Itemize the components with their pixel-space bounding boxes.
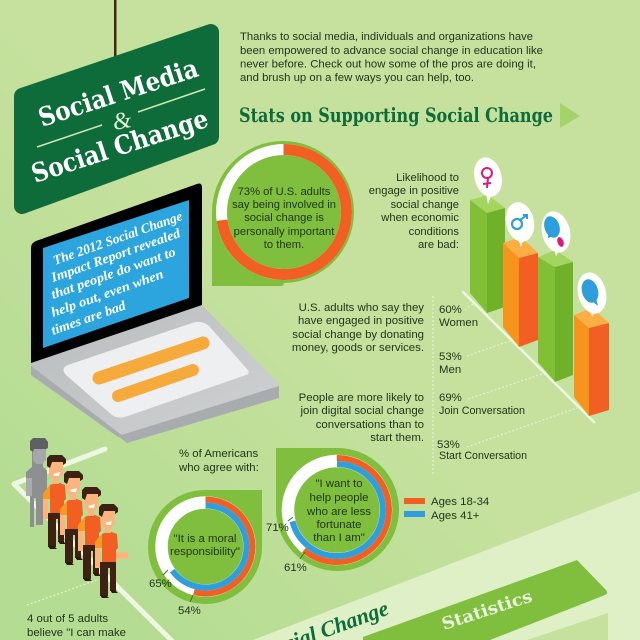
intro paragraph: Thanks to social media, individuals and organizations have [240,31,533,43]
text: donating [292,302,424,354]
intro paragraph: been empowered to advance social change in education like [240,45,543,57]
laptop screen text: that people do want to [49,244,178,302]
text: likelihood: conditions [409,226,459,238]
text: percent of Americans: % of Americans [179,448,258,460]
laptop screen text: help out, even when [49,266,165,320]
bar labels: Start Conversation [439,450,527,462]
text: digital conversations: People are more likely to [299,392,424,404]
heading arrow [560,103,580,128]
statistics label: Statistics [439,587,535,635]
dotted guide lines [27,296,577,605]
donut: moral responsibility [148,490,262,617]
title sign [22,32,212,206]
legend [404,496,489,522]
lower light band [253,491,640,640]
donut: moral responsibility: "It is a moral [174,533,236,545]
title text: Social Media: Social Media [35,54,202,134]
bar: join conversation [537,208,575,382]
person: fourth orange [95,504,128,598]
bar labels: Join Conversation [439,405,525,417]
text: donating: social change by donating [292,329,424,341]
text: likelihood: are bad: [418,239,459,251]
text: donating: have engaged in positive [298,315,424,327]
laptop screen text: times are bad [49,298,128,338]
icon: male bubble [502,200,538,247]
title ampersand: & [111,107,134,136]
intro paragraph: never before. Check out how some of the pros are doing it, [240,58,536,70]
donut: moral responsibility: responsibility" [170,546,240,558]
donut: 73 percent: 73% of U.S. adults [238,186,331,198]
donut: 73 percent: personally important [234,226,335,238]
text: digital conversations: join digital social change [300,405,424,417]
bar labels: 60% [439,304,462,316]
intro paragraph [240,31,543,84]
donut: 73 percent: to them. [264,239,304,251]
bar: women [470,154,506,313]
laptop screen text: Impact Report revealed [48,225,182,285]
text: likelihood: social change [391,199,459,211]
statistics ribbon [363,560,607,640]
legend: Ages 41+ [431,510,480,522]
laptop screen text [48,208,184,338]
person: third orange [78,487,101,581]
text: likelihood: when economic [380,212,459,224]
donut: 73 percent: social change is [244,212,324,224]
laptop screen [31,184,202,363]
lower panel [527,613,608,640]
text: donating: money, goods or services. [292,342,424,354]
donut: moral responsibility: 65% [149,578,172,590]
text: digital conversations: start them. [370,432,424,444]
text: 4 out of 5 adults: believe "I can make [27,627,126,639]
text: digital conversations [299,392,424,444]
laptop screen text: The 2012 Social Change [51,208,184,268]
person: first orange [43,455,66,549]
rope [114,0,116,58]
laptop [31,184,279,443]
donut: fortunate [266,448,399,574]
floor lines [14,292,594,640]
people illustration [26,438,128,598]
donut: fortunate: 71% [266,522,289,534]
text: 4 out of 5 adults: 4 out of 5 adults [27,613,108,625]
bar labels: Men [439,364,461,376]
text: likelihood: Likelihood to [396,172,459,184]
bar labels: 53% [437,439,460,451]
donut: fortunate: fortunate [317,519,361,531]
donut: fortunate: "I want to [315,478,363,490]
intro paragraph: and brush up on a few ways you can help, too. [240,72,474,84]
icon: two speech bubbles [537,208,575,256]
bar: men [502,200,538,347]
person: second orange [60,471,83,565]
text: likelihood [369,172,459,251]
bar labels: 53% [439,351,462,363]
donut: 73 percent [212,141,354,286]
text: percent of Americans [178,448,259,474]
legend: Ages 18-34 [431,496,489,508]
person: gray adult [26,438,48,527]
text: likelihood: engage in positive [369,185,459,197]
text: donating: U.S. adults who say they [299,302,424,314]
donut: fortunate: help people [310,492,368,504]
title text: Social Change: Social Change [28,104,212,190]
section heading: Stats on Supporting Social Change [239,103,553,127]
icon: female bubble [470,154,506,204]
icon: speech bubble [573,269,611,317]
donut: 73 percent: say being involved in [232,199,336,211]
bar labels [437,304,527,462]
bar labels: Women [439,317,478,329]
bar: start conversation [573,269,611,416]
bar labels: 69% [439,392,462,404]
text: digital conversations: conversations than to [316,419,424,431]
laptop base [31,305,279,443]
donut: fortunate: 61% [284,562,307,574]
text: percent of Americans: who agree with: [178,462,259,474]
donut: fortunate: who are less [306,506,371,518]
donut: moral responsibility: 54% [178,605,201,617]
donut: fortunate: than I am" [313,532,365,544]
text: 4 out of 5 adults [27,613,126,639]
